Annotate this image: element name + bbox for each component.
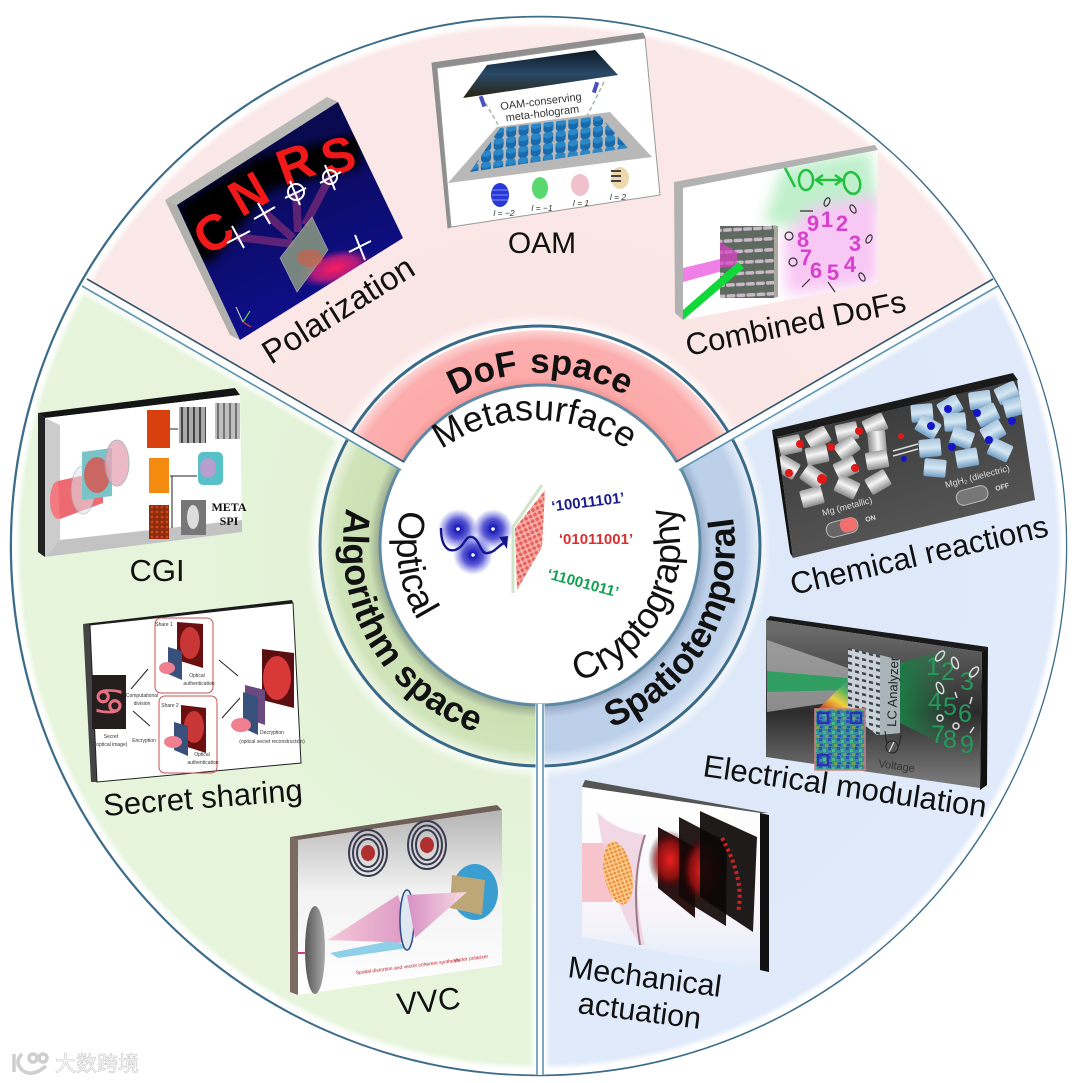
text: projected digits: 6 — [958, 700, 972, 728]
label: Mechanical: Mechanical — [566, 950, 723, 1004]
panel image: Polarization: C — [183, 200, 244, 266]
label: Secret sharing: Secret sharing — [102, 772, 304, 823]
icon: metasurface encoding light into binary — [438, 485, 633, 601]
icon: light spots — [438, 509, 513, 575]
panel image: Polarization: S — [315, 125, 362, 187]
panel image: Combined DoFs: 1 — [821, 207, 833, 232]
text: flow captions: Share 2 — [161, 703, 179, 709]
text: binary green: ‘11001011’ — [545, 566, 621, 601]
text: projected digits: 4 — [928, 688, 942, 716]
panel image: Combined DoFs: 9 — [807, 211, 819, 236]
text: binary blue: ‘10011101’ — [551, 490, 626, 515]
text: switch labels: ON — [865, 514, 877, 524]
text: mode numbers: l = 1 — [573, 198, 589, 208]
panel: Spatiotemporal sector — [540, 275, 1080, 1083]
panel image: VVC — [290, 805, 502, 995]
text: switch labels: MgH₂ (dielectric) — [944, 463, 1011, 490]
label: Chemical reactions: Chemical reactions — [787, 508, 1051, 602]
text: flow captions: authentication — [187, 760, 219, 766]
text: projected digits: 8 — [943, 726, 957, 754]
panel image: Polarization — [165, 97, 403, 340]
heading: Algorithm space: Algorithm space — [336, 508, 480, 730]
panel: DoF sector — [70, 1, 1010, 435]
text: VVC captions: Vector polarizer — [453, 954, 489, 964]
panel image: OAM — [432, 33, 660, 228]
icon: metasurface plate — [513, 485, 545, 593]
text: switch labels: Mg (metallic) — [821, 495, 873, 518]
text: watermark: 大数跨境 — [55, 1053, 139, 1076]
text: mode numbers — [493, 192, 626, 218]
text: VVC captions: Spatial distortion and vector coherent synthesis — [356, 958, 461, 976]
panel image: Combined DoFs: 3 — [849, 231, 861, 256]
label: Combined DoFs: Combined DoFs — [682, 284, 909, 363]
text: flow captions: (optical image) — [95, 742, 128, 748]
icon: OFF switch — [955, 484, 990, 507]
label: CGI: CGI — [129, 553, 185, 588]
label: actuation: actuation — [576, 986, 703, 1036]
arrow: wavy light beam — [441, 528, 508, 553]
text: mode numbers: l = 2 — [610, 192, 626, 202]
text: META SPI: SPI — [220, 514, 239, 528]
label: Electrical modulation: Electrical modulation — [701, 748, 989, 824]
text: projected digits: 9 — [960, 731, 974, 759]
text: flow captions: division — [134, 701, 151, 707]
text: flow captions: Optical — [194, 752, 210, 758]
panel image: Combined DoFs — [674, 145, 878, 320]
panel image: Combined DoFs: 8 — [797, 227, 809, 252]
text: hologram caption: OAM-conserving — [500, 91, 582, 113]
panel image: Combined DoFs: 6 — [810, 258, 822, 283]
panel image: Secret sharing — [83, 600, 305, 782]
text: flow captions: Share 1 — [155, 622, 173, 628]
icon: voltage knob — [885, 731, 901, 753]
text: projected digits: 3 — [960, 668, 974, 696]
panel image: Chemical reactions — [772, 373, 1035, 558]
text: flow captions — [95, 622, 305, 766]
central ring — [320, 326, 760, 766]
text: flow captions: authentication — [183, 681, 215, 687]
label: VVC: VVC — [395, 980, 462, 1022]
watermark — [14, 1053, 139, 1076]
text: flow captions: (optical secret reconstruction) — [239, 739, 305, 745]
icon: secret symbol: ♋ — [93, 682, 125, 723]
panel image: Combined DoFs: 5 — [827, 260, 839, 285]
panel image: Combined DoFs: 4 — [844, 252, 857, 277]
title arc: Optical: Optical — [389, 513, 440, 619]
panel image: Combined DoFs: 2 — [836, 211, 848, 236]
text: projected digits: 2 — [941, 658, 955, 686]
panel image: Electrical modulation — [766, 616, 988, 790]
text: flow captions: Encryption — [132, 738, 156, 744]
panel image: CGI — [38, 388, 247, 557]
heading: Spatiotemporal: Spatiotemporal — [605, 520, 736, 725]
panel: Algorithm sector — [0, 275, 540, 1083]
label: OAM: OAM — [508, 227, 576, 260]
panel image: Mechanical actuation — [582, 780, 769, 972]
text: META SPI: META — [211, 500, 247, 514]
icon: ON switch — [825, 516, 860, 539]
title arc: Cryptography: Cryptography — [574, 510, 688, 678]
text: flow captions: Computational — [126, 693, 158, 699]
text: projected digits — [926, 653, 974, 759]
text: flow captions: Decryption — [260, 730, 284, 736]
text: projected digits: 5 — [943, 693, 957, 721]
title arc: Metasurface: Metasurface — [431, 399, 634, 448]
panel image: Combined DoFs: 7 — [800, 245, 812, 270]
text: projected digits: 1 — [926, 653, 940, 681]
panel image: Polarization: N — [219, 161, 278, 227]
panel image: Polarization: R — [269, 131, 322, 196]
icon: watermark logo — [14, 1054, 47, 1073]
text: switch labels — [821, 463, 1011, 524]
text: switch labels: OFF — [995, 482, 1011, 493]
text: flow captions: Secret — [104, 734, 119, 740]
label: Polarization: Polarization — [255, 248, 421, 371]
text: LC Analyzer: LC Analyzer — [884, 656, 901, 727]
text: projected digits: 7 — [931, 721, 945, 749]
icon: OAM modes — [491, 167, 629, 207]
text: binary red: ‘01011001’ — [559, 531, 633, 548]
text: mode numbers: l = −1 — [531, 203, 553, 213]
text: VVC captions — [356, 954, 489, 976]
text: mode numbers: l = −2 — [493, 208, 515, 218]
heading: DoF space: DoF space — [446, 350, 630, 394]
text: hologram caption: meta-hologram — [505, 103, 580, 124]
text: flow captions: Optical — [189, 673, 205, 679]
icon: QR code — [815, 709, 865, 770]
text: Voltage: Voltage — [878, 758, 916, 775]
